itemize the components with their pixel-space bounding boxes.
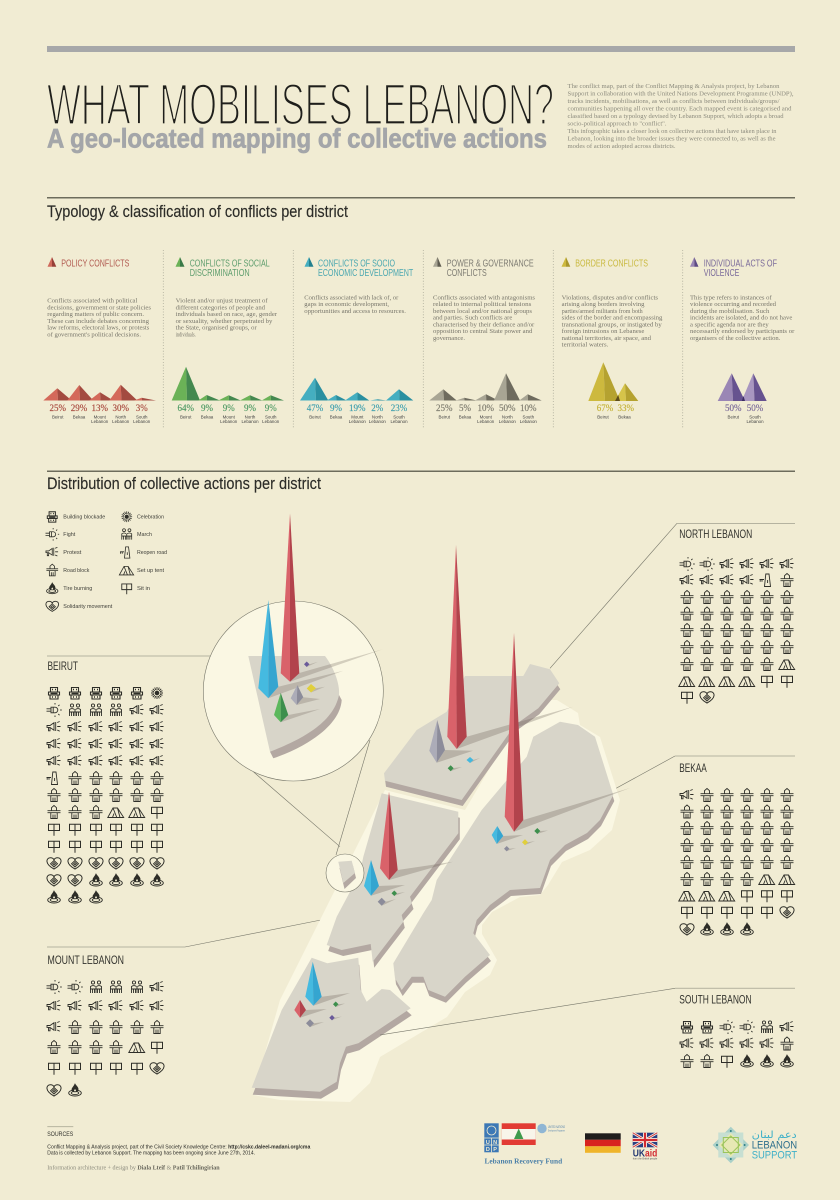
logo: United Nations: Development Programme — [548, 1130, 565, 1132]
description: policy conflicts: regarding matters of public concern. — [47, 311, 144, 318]
intro text block: This infographic takes a closer look on collective actions that have taken place in — [568, 128, 777, 135]
panel: socio economic development — [300, 257, 413, 424]
legend: Celebration — [137, 514, 164, 520]
description: border conflicts: transnational groups, or instigated by — [562, 321, 663, 328]
description: individual acts of violence: necessarily endorsed by participants or — [690, 328, 794, 335]
mountain chart: socio economic development: Bekaa — [330, 414, 343, 420]
legend: Solidarity movement — [63, 604, 113, 610]
spire: Beirut policy — [281, 513, 299, 682]
mountain chart: social discrimination: Lebanon — [262, 419, 280, 424]
map of Lebanon — [47, 513, 795, 1102]
mountain chart: social discrimination: 9% — [265, 403, 277, 413]
mountain chart: social discrimination: Mount — [223, 414, 236, 420]
heading: socio economic development: ECONOMIC DEVELOPMENT — [318, 268, 413, 279]
flag: Germany — [585, 1133, 621, 1153]
logo: UK aid: UKaid — [633, 1148, 657, 1160]
shadows — [268, 649, 383, 722]
legend: Sit in — [137, 586, 150, 592]
heading: distribution: Distribution of collective actions per district — [47, 475, 321, 493]
sources block — [47, 1126, 311, 1171]
icon: purple triangle — [690, 257, 698, 267]
description: policy conflicts: Conflicts associated with political — [47, 298, 138, 304]
mountain chart: social discrimination: Lebanon — [220, 419, 238, 424]
mountain chart: power and governance: Mount — [480, 414, 493, 420]
mountain chart: power and governance: 50% — [499, 403, 516, 413]
logo: United Nations — [537, 1124, 565, 1133]
logo: UK aid — [633, 1133, 658, 1160]
label: South Lebanon: SOUTH LEBANON — [679, 992, 752, 1006]
mountain chart: individual acts of violence: Lebanon — [746, 419, 764, 424]
intro text block — [568, 83, 794, 150]
top bar — [47, 46, 795, 52]
text: logotype: LEBANON — [752, 1140, 797, 1152]
mountain chart: socio economic development: Mount — [351, 414, 364, 420]
mountain chart: social discrimination: 9% — [223, 403, 235, 413]
icon grid: Mount Lebanon — [46, 980, 164, 1096]
heading: socio economic development — [318, 259, 413, 279]
spire: Beirut governance — [291, 685, 303, 705]
legend: Set up tent — [137, 568, 165, 574]
description: policy conflicts: decisions, government or state policies — [47, 304, 152, 311]
intro text block: tracks incidents, mobilisations, as well as conflicts between individuals/groups/ — [568, 98, 780, 105]
mountain chart: policy conflicts: Lebanon — [91, 419, 109, 424]
legend: Tire burning — [63, 586, 92, 592]
panel: power and governance — [429, 257, 542, 424]
marker: Mount Lebanon discrimination — [392, 890, 397, 896]
mountain chart: policy conflicts: 29% — [71, 403, 88, 413]
mountain chart: socio economic development: Beirut — [309, 414, 322, 420]
description: power and governance — [433, 294, 536, 342]
description: socio economic development: Conflicts associated with lack of, or — [304, 294, 398, 301]
mountain chart: social discrimination: Beirut — [180, 414, 192, 420]
mountain chart: socio economic development: 19% — [349, 403, 366, 413]
spire: Mount Lebanon socio-economic — [364, 860, 379, 896]
mountain chart: policy conflicts: South — [136, 414, 148, 420]
heading: power and governance: CONFLICTS — [447, 268, 487, 279]
spire: South Lebanon policy — [294, 1000, 306, 1018]
logo: UNDP: P — [493, 1147, 497, 1153]
spire: Bekaa policy — [505, 633, 523, 832]
description: border conflicts: national territories, air space, and — [562, 335, 652, 342]
marker: Bekaa discrimination — [534, 828, 540, 834]
description: individual acts of violence: during the mobilisation. Such — [690, 308, 770, 315]
intro text block: classified based on a typology devised by Lebanon Support, which adopts a broad — [568, 113, 784, 120]
mountain chart: social discrimination: North — [245, 414, 256, 420]
description: policy conflicts — [47, 298, 152, 338]
mountain chart: policy conflicts: 30% — [112, 403, 129, 413]
intro text block: socio-political approach to "conflict". — [568, 120, 667, 128]
mountain chart: power and governance: 5% — [459, 403, 472, 413]
description: border conflicts: foreign intrusions on Lebanese — [562, 328, 645, 335]
heading: social discrimination: DISCRIMINATION — [190, 268, 250, 279]
intro text block: Support in collaboration with the United Nations Development Programme (UNDP), — [568, 90, 794, 98]
mountain chart: policy conflicts: Lebanon — [112, 419, 130, 424]
region: Mount Lebanon — [327, 793, 460, 968]
description: power and governance: related to internal political tensions — [433, 301, 532, 308]
mountain chart: policy conflicts: Beirut — [52, 414, 64, 420]
mountain chart: power and governance: 10% — [520, 403, 537, 413]
heading: policy conflicts: POLICY CONFLICTS — [61, 259, 130, 270]
logo: UK aid: from the British people — [633, 1158, 658, 1160]
text: logotype — [752, 1140, 797, 1161]
heading: power and governance — [447, 259, 534, 279]
description: individual acts of violence — [690, 294, 794, 342]
spire: Bekaa socio-economic — [492, 826, 503, 844]
mountain chart: border conflicts: 67% — [597, 403, 614, 413]
description: social discrimination: individuals based on race, age, gender — [176, 311, 277, 318]
description: individual acts of violence: organisers of the collective action. — [690, 335, 781, 342]
mountain chart: socio economic development: Lebanon — [349, 419, 366, 424]
description: power and governance: Conflicts associated with antagonisms — [433, 294, 536, 301]
intro text block: The conflict map, part of the Conflict Mapping & Analysis project, by Lebanon — [568, 83, 780, 90]
description: border conflicts: sides of the border and encompassing — [562, 315, 662, 322]
description: power and governance: opposition to central State power and — [433, 328, 533, 335]
description: social discrimination: different categories of people and — [176, 304, 266, 311]
mountain chart: socio economic development: 47% — [307, 403, 324, 413]
description: individual acts of violence: This type refers to instances of — [690, 294, 773, 301]
marker: Beirut border — [307, 684, 316, 692]
logo: UNDP: D — [486, 1147, 490, 1153]
marker: South Lebanon governance — [306, 1019, 314, 1027]
subtitle: A geo-located mapping of collective actions — [47, 124, 547, 154]
mountain chart: policy conflicts: Bekaa — [73, 414, 86, 420]
legend: Reopen road — [137, 550, 167, 556]
panel: social discrimination — [172, 257, 284, 424]
mountain chart: power and governance: 10% — [477, 403, 494, 413]
marker: Beirut violence — [304, 662, 310, 667]
legend: Protest — [63, 550, 82, 556]
icon: red triangle — [48, 257, 56, 267]
description: border conflicts: territorial waters. — [562, 342, 609, 349]
spire: Beirut socio-economic — [258, 600, 278, 698]
mountain chart: individual acts of violence: 50% — [747, 403, 764, 413]
logo: UNDP: U — [486, 1140, 490, 1146]
description: individual acts of violence: incidents are isolated, and do not have — [690, 315, 793, 322]
intro text block: Lebanon, looking into the broader issues they were connected to, as well as the — [568, 136, 776, 142]
icon: teal triangle — [304, 257, 314, 267]
mountain chart: power and governance: South — [523, 414, 535, 420]
icon: grey triangle — [433, 257, 442, 267]
mountain chart: policy conflicts — [43, 385, 156, 424]
spire: Mount Lebanon policy — [380, 792, 398, 880]
mountain chart: social discrimination: 9% — [201, 403, 214, 413]
description: individual acts of violence: a specific agenda nor are they — [690, 321, 770, 328]
mountain chart: social discrimination: 64% — [177, 403, 194, 413]
small Beirut locator circle — [326, 854, 364, 892]
mountain chart: social discrimination — [172, 367, 284, 424]
marker: North Lebanon discrimination — [448, 765, 454, 771]
mountain chart: socio economic development — [300, 378, 413, 424]
icon grid: Beirut — [46, 687, 164, 903]
mountain chart: individual acts of violence: 50% — [725, 403, 742, 413]
icon: green triangle — [176, 257, 184, 267]
description: socio economic development: gaps in economic development, — [304, 301, 389, 308]
halo under map — [253, 700, 620, 1102]
legend — [46, 511, 167, 611]
shadows on national map — [300, 707, 630, 1027]
sources block: Conflict Mapping & Analysis project, part of the Civil Society Knowledge Centre: http://cskc.daleel-madani.org/cma — [47, 1144, 311, 1150]
description: border conflicts: arising along borders involving — [562, 301, 644, 308]
mountain chart: socio economic development: 2% — [371, 403, 384, 413]
mountain chart: social discrimination: Bekaa — [201, 414, 214, 420]
heading: socio economic development: CONFLICTS OF SOCIO — [318, 259, 395, 270]
heading: social discrimination: CONFLICTS OF SOCIAL — [190, 259, 270, 270]
icon grid: North Lebanon — [679, 557, 795, 704]
mountain chart: social discrimination: 9% — [244, 403, 256, 413]
spire: South Lebanon socio-economic — [305, 962, 322, 1006]
logo: UNDP: N — [493, 1140, 497, 1146]
spire: Beirut discrimination — [274, 693, 288, 722]
mountain chart: socio economic development: Lebanon — [369, 419, 386, 424]
description: social discrimination — [176, 298, 277, 338]
panel: individual acts of violence — [690, 257, 794, 424]
label: Beirut: BEIRUT — [48, 659, 78, 673]
mountain chart: power and governance: North — [502, 414, 513, 420]
logo: United Nations: UNITED NATIONS — [548, 1125, 565, 1129]
sources block: Information architecture + design by Diala Lteif & Patil Tchilingirian — [47, 1164, 220, 1171]
region: Bekaa — [393, 722, 614, 1003]
panel: border conflicts — [562, 257, 663, 420]
intro text block: communities happening all over the country. Each mapped event is categorised and — [568, 106, 792, 112]
marker: Mount Lebanon governance — [378, 898, 386, 906]
description: power and governance: and parties. Such conflicts are — [433, 315, 513, 322]
mountain chart: border conflicts: Beirut — [597, 414, 610, 420]
mountain chart: socio economic development: North — [372, 414, 383, 420]
description: border conflicts: Violations, disputes and/or conflicts — [562, 294, 659, 301]
mountain chart: border conflicts: 33% — [617, 403, 634, 413]
mountain chart: policy conflicts: Lebanon — [133, 419, 151, 424]
mountain chart: socio economic development: 23% — [391, 403, 408, 413]
description: border conflicts: parties/armed militants from both — [562, 308, 644, 315]
mountain chart: policy conflicts: 3% — [136, 403, 148, 413]
description: social discrimination: individuals. — [176, 331, 196, 338]
legend: Road block — [63, 568, 90, 574]
spire: North Lebanon governance — [429, 720, 445, 763]
icon grid: South Lebanon — [680, 1020, 794, 1068]
heading: individual acts of violence — [704, 259, 777, 279]
mountain chart: power and governance: Bekaa — [459, 414, 472, 420]
legend: March — [137, 532, 152, 538]
marker: North Lebanon socio-economic — [466, 757, 474, 763]
mountain chart: socio economic development: 9% — [330, 403, 342, 413]
description: socio economic development: opportunities and access to resources. — [304, 308, 406, 315]
region: South Lebanon — [252, 958, 412, 1099]
text: logotype: SUPPORT — [752, 1149, 797, 1161]
mountain chart: power and governance: Lebanon — [520, 419, 537, 424]
description: policy conflicts: of government's political decisions. — [47, 331, 141, 338]
marker: Bekaa governance — [504, 846, 509, 851]
mountain chart: individual acts of violence — [718, 373, 767, 424]
mountain chart: social discrimination: South — [265, 414, 277, 420]
mountain chart: power and governance: Lebanon — [477, 419, 495, 424]
marker: South Lebanon discrimination — [333, 1002, 338, 1007]
logo: Lebanon Support — [713, 1127, 797, 1163]
description: power and governance: governance. — [433, 335, 465, 342]
icon: geometric star — [713, 1127, 749, 1163]
mountain chart: policy conflicts: North — [115, 414, 127, 420]
description: individual acts of violence: violence occurring and recorded — [690, 301, 777, 308]
description: border conflicts — [562, 294, 663, 349]
logo: UNDP — [484, 1123, 499, 1153]
mountain chart: power and governance: Beirut — [439, 414, 451, 420]
icon: yellow triangle — [562, 257, 570, 267]
sources block: SOURCES — [47, 1131, 74, 1138]
heading: power and governance: POWER & GOVERNANCE — [447, 259, 534, 270]
description: policy conflicts: law reforms, electoral laws, or protests — [47, 324, 150, 332]
mountain chart: power and governance: 25% — [436, 403, 453, 413]
flag: Lebanon — [502, 1123, 536, 1145]
marker: South Lebanon violence — [329, 1015, 335, 1020]
panel: policy conflicts — [43, 257, 156, 424]
heading: individual acts of violence: VIOLENCE — [704, 268, 740, 279]
label: North Lebanon: NORTH LEBANON — [679, 527, 752, 541]
marker: Bekaa border — [522, 839, 528, 845]
mountain chart: border conflicts: Bekaa — [618, 414, 631, 420]
spire: North Lebanon policy — [447, 545, 467, 749]
mountain chart: social discrimination: Lebanon — [241, 419, 259, 424]
mountain chart: power and governance: Lebanon — [499, 419, 516, 424]
mountain chart: socio economic development: South — [393, 414, 405, 420]
description: social discrimination: the State, organised groups, or — [176, 324, 257, 332]
mountain chart: individual acts of violence: Beirut — [728, 414, 740, 420]
icon grid: Bekaa — [679, 788, 795, 935]
heading: individual acts of violence: INDIVIDUAL ACTS OF — [704, 259, 777, 270]
mountain chart: policy conflicts: 25% — [49, 403, 66, 413]
Beirut zoom circle — [203, 513, 383, 781]
legend: Fight — [63, 532, 76, 538]
mountain chart: individual acts of violence: South — [749, 414, 761, 420]
label: Bekaa: BEKAA — [679, 761, 707, 775]
mountain chart: power and governance — [429, 373, 542, 424]
legend: Building blockade — [63, 514, 105, 520]
label: Lebanon Recovery Fund: Lebanon Recovery Fund — [484, 1157, 562, 1165]
heading: typology: Typology & classification of conflicts per district — [47, 203, 348, 221]
description: socio economic development — [304, 294, 406, 315]
text: Arabic logotype: دعم لبنان — [752, 1130, 797, 1141]
heading: social discrimination — [190, 259, 270, 279]
description: power and governance: between local and/or national groups — [433, 308, 533, 315]
description: policy conflicts: These can include debates concerning — [47, 318, 149, 325]
description: social discrimination: Violent and/or unjust treatment of — [176, 298, 269, 304]
mountain chart: border conflicts — [588, 362, 638, 420]
heading: border conflicts: BORDER CONFLICTS — [575, 259, 648, 270]
mountain chart: policy conflicts: 13% — [91, 403, 108, 413]
description: power and governance: characterised by their defiance and/or — [433, 321, 534, 328]
region: North Lebanon — [384, 664, 560, 806]
intro text block: modes of action adopted across districts. — [568, 143, 676, 150]
description: social discrimination: or sexuality, whether perpetrated by — [176, 318, 273, 325]
mountain chart: policy conflicts: Mount — [94, 414, 107, 420]
label: Mount Lebanon: MOUNT LEBANON — [48, 953, 124, 967]
mountain chart: socio economic development: Lebanon — [390, 419, 408, 424]
sources block: Data is collected by Lebanon Support. The mapping has been ongoing since June 27th, 2014. — [47, 1151, 255, 1157]
